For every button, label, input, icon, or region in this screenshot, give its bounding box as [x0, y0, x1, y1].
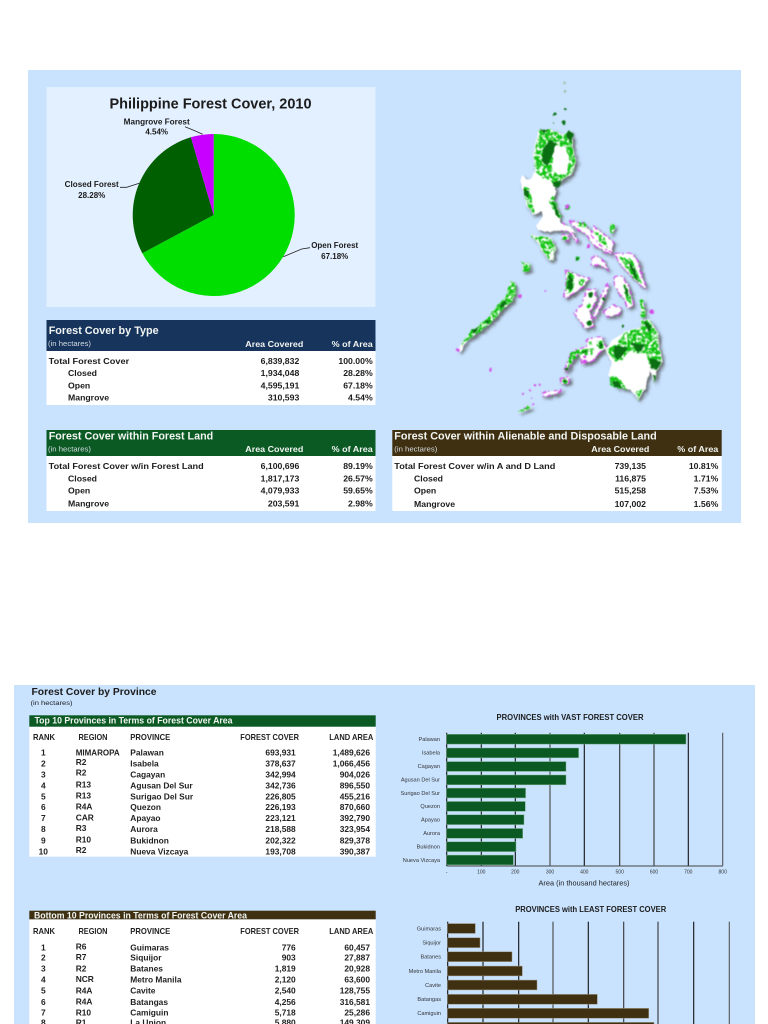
- table: top 10 provinces: R13: [76, 790, 91, 800]
- table: forest cover within alienable and disposable land: 1.56%: [694, 499, 719, 509]
- table: forest cover by type: 310,593: [268, 393, 299, 403]
- pie slice: mangrove forest: [191, 134, 214, 215]
- chart: provinces with vast forest cover: Agusan Del Sur: [401, 778, 440, 784]
- chart title: PROVINCES with LEAST FOREST COVER: [515, 905, 666, 914]
- chart: provinces with vast forest cover: 100: [477, 870, 486, 876]
- table: bottom 10 provinces: Camiguin: [130, 1007, 168, 1017]
- table: forest cover within forest land: % of Area: [332, 444, 373, 454]
- table: top 10 provinces: R2: [76, 845, 87, 855]
- chart: provinces with vast forest cover: 500: [616, 870, 624, 876]
- pie label: closed forest: [65, 180, 139, 200]
- table: bottom 10 provinces: 60,457: [344, 942, 370, 952]
- table: top 10 provinces: 193,708: [265, 846, 296, 856]
- table: forest cover by type: 1,934,048: [261, 368, 299, 378]
- chart: provinces with vast forest cover: 600: [650, 870, 658, 876]
- table: bottom 10 provinces: RANK: [33, 926, 55, 936]
- table: forest cover within forest land: Open: [68, 486, 90, 496]
- table: top 10 provinces: Bukidnon: [130, 835, 169, 845]
- chart: provinces with least forest cover: Batanes: [420, 955, 441, 961]
- heading: forest cover by province: Forest Cover by Province: [32, 687, 157, 698]
- table: bottom 10 provinces: 7: [41, 1007, 46, 1017]
- table: top 10 provinces: CAR: [76, 813, 94, 823]
- chart: provinces with vast forest cover: 700: [684, 870, 693, 876]
- chart: provinces with vast forest cover: Bukidnon: [417, 844, 440, 850]
- pie label: open forest: [283, 241, 359, 261]
- chart: provinces with least forest cover: [409, 905, 729, 1024]
- chart: provinces with vast forest cover: Nueva Vizcaya: [403, 858, 441, 864]
- table: forest cover by type: 67.18%: [343, 380, 373, 390]
- dark green closed forest: [472, 82, 662, 388]
- table: bottom 10 provinces: 25,286: [344, 1007, 370, 1017]
- table: forest cover by type: 6,839,832: [261, 356, 299, 366]
- table: forest cover within alienable and disposable land: % of Area: [677, 444, 718, 454]
- table: forest cover within forest land: Total Forest Cover w/in Forest Land: [49, 461, 204, 471]
- table: forest cover within alienable and disposable land: (in hectares): [394, 446, 437, 454]
- table: forest cover by type: 100.00%: [338, 356, 373, 366]
- table: bottom 10 provinces: 316,581: [340, 997, 370, 1007]
- land with magenta fringe and shadow: [457, 129, 663, 412]
- table: forest cover within forest land: Mangrove: [68, 499, 109, 509]
- table: forest cover within forest land: 6,100,696: [261, 461, 299, 471]
- table: forest cover within alienable and disposable land: 116,875: [615, 473, 646, 483]
- pie label: open forest: 67.18%: [321, 252, 348, 261]
- table: top 10 provinces: 3: [41, 770, 46, 780]
- table: top 10 provinces: 202,322: [265, 835, 296, 845]
- pie label: closed forest: Closed Forest: [65, 180, 119, 189]
- table: bottom 10 provinces: 1: [41, 942, 46, 952]
- table: forest cover within alienable and disposable land: 107,002: [615, 499, 646, 509]
- table: bottom 10 provinces: Bottom 10 Provinces in Terms of Forest Cover Area: [34, 909, 248, 920]
- table: top 10 provinces: Apayao: [130, 813, 161, 823]
- table: top 10 provinces: 6: [41, 802, 46, 812]
- table: top 10 provinces: R4A: [76, 802, 92, 812]
- table: top 10 provinces: Isabela: [130, 758, 159, 768]
- table: top 10 provinces: 9: [41, 835, 46, 845]
- table: bottom 10 provinces: 63,600: [344, 975, 370, 985]
- table: top 10 provinces: 218,588: [265, 824, 296, 834]
- table: top 10 provinces: Cagayan: [130, 770, 165, 780]
- table: top 10 provinces: Aurora: [130, 824, 158, 834]
- table: top 10 provinces: 1,489,626: [333, 747, 370, 757]
- table: top 10 provinces: Quezon: [130, 802, 161, 812]
- table: top 10 provinces: 223,121: [265, 813, 296, 823]
- table: bottom 10 provinces: 20,928: [344, 964, 370, 974]
- table: forest cover by type: % of Area: [332, 339, 373, 349]
- chart title: PROVINCES with VAST FOREST COVER: [496, 713, 644, 722]
- table: forest cover within alienable and disposable land: 7.53%: [694, 486, 719, 496]
- table: bottom 10 provinces: 2: [41, 953, 46, 963]
- table: bottom 10 provinces: Guimaras: [130, 942, 169, 952]
- magenta mangrove specks: [456, 205, 654, 409]
- pie label: mangrove forest: 4.54%: [145, 128, 168, 136]
- table: top 10 provinces: 829,378: [340, 835, 370, 845]
- table: top 10 provinces: 342,994: [265, 770, 296, 780]
- table: bottom 10 provinces: 2,120: [275, 975, 296, 985]
- table: top 10 provinces: PROVINCE: [130, 732, 171, 742]
- table heading: forest cover by type: Forest Cover by Type: [49, 325, 159, 337]
- table: top 10 provinces: 904,026: [340, 770, 370, 780]
- table: top 10 provinces: 693,931: [265, 747, 296, 757]
- table: forest cover by type: Closed: [68, 368, 97, 378]
- chart: provinces with least forest cover: Siquijor: [422, 941, 441, 947]
- table: bottom 10 provinces: 5,718: [275, 1007, 296, 1017]
- table: forest cover within alienable and disposable land: Closed: [414, 473, 443, 483]
- table: bottom 10 provinces: 4,256: [275, 997, 296, 1007]
- chart: provinces with vast forest cover: [400, 713, 727, 888]
- table: bottom 10 provinces: Siquijor: [130, 953, 162, 963]
- chart: provinces with vast forest cover: Isabela: [422, 750, 441, 756]
- table: bottom 10 provinces: R4A: [76, 996, 92, 1006]
- table: forest cover within forest land: 89.19%: [343, 461, 373, 471]
- table: top 10 provinces: [29, 714, 376, 857]
- table: top 10 provinces: R2: [76, 768, 87, 778]
- panel: pie chart: [46, 87, 376, 307]
- pie slice: open forest: [142, 134, 295, 296]
- table: bottom 10 provinces: R2: [76, 963, 87, 973]
- bright green open forest: [461, 129, 662, 412]
- table: bottom 10 provinces: R7: [76, 952, 87, 962]
- pie label: mangrove forest: [124, 118, 203, 136]
- white central plains: [549, 145, 645, 392]
- table: forest cover within alienable and disposable land: Mangrove: [414, 499, 455, 509]
- table: top 10 provinces: R3: [76, 823, 87, 833]
- table: forest cover within alienable and disposable land: [392, 430, 722, 511]
- chart: provinces with vast forest cover: 300: [546, 870, 554, 876]
- table: bottom 10 provinces: 2,540: [275, 986, 296, 996]
- table: forest cover within forest land: 26.57%: [343, 473, 373, 483]
- table: forest cover within alienable and disposable land: 739,135: [615, 461, 646, 471]
- table heading: within alienable and disposable land: Forest Cover within Alienable and Disposable Land: [394, 430, 657, 442]
- table: bottom 10 provinces: 1,819: [275, 964, 296, 974]
- table: top 10 provinces: Palawan: [130, 747, 164, 757]
- table: forest cover within forest land: 1,817,173: [261, 473, 299, 483]
- heading: pie chart title: Philippine Forest Cover, 2010: [110, 96, 312, 112]
- table: bottom 10 provinces: REGION: [78, 926, 108, 936]
- table: bottom 10 provinces: NCR: [76, 974, 94, 984]
- table: bottom 10 provinces: 27,887: [344, 953, 370, 963]
- table: top 10 provinces: 455,216: [340, 791, 370, 801]
- table: forest cover within forest land: (in hectares): [48, 446, 91, 454]
- chart: provinces with least forest cover: Metro Manila: [409, 969, 442, 975]
- chart: provinces with vast forest cover: 200: [511, 870, 520, 876]
- table: top 10 provinces: 226,193: [265, 802, 296, 812]
- table: top 10 provinces: 1: [41, 747, 46, 757]
- table: bottom 10 provinces: LAND AREA: [329, 926, 373, 936]
- table: forest cover within alienable and disposable land: 515,258: [615, 486, 646, 496]
- table: forest cover within alienable and disposable land: 1.71%: [694, 473, 719, 483]
- table: bottom 10 provinces: 6: [41, 997, 46, 1007]
- table: forest cover within forest land: 203,591: [268, 499, 299, 509]
- table: top 10 provinces: 5: [41, 791, 46, 801]
- chart: provinces with least forest cover: Batangas: [417, 997, 441, 1003]
- chart: provinces with vast forest cover: 400: [580, 870, 589, 876]
- table: forest cover within forest land: 2.98%: [348, 499, 373, 509]
- axis title: Area (in thousand hectares): [538, 878, 630, 888]
- table: bottom 10 provinces: 4: [41, 975, 46, 985]
- chart: provinces with vast forest cover: Apayao: [421, 818, 440, 824]
- table: forest cover within forest land: Area Covered: [245, 444, 303, 454]
- table: top 10 provinces: R13: [76, 779, 91, 789]
- table: top 10 provinces: 4: [41, 781, 46, 791]
- table: bottom 10 provinces: R6: [76, 941, 87, 951]
- chart: provinces with vast forest cover: Quezon: [420, 804, 440, 810]
- table: bottom 10 provinces: PROVINCE: [130, 926, 171, 936]
- table: forest cover by type: 4.54%: [348, 393, 373, 403]
- table: top 10 provinces: 2: [41, 758, 46, 768]
- table: forest cover by type: Open: [68, 380, 90, 390]
- pie slice: closed forest: [133, 137, 214, 253]
- panel: forest cover by province: [14, 685, 755, 1024]
- map: Philippines forest cover: [456, 82, 663, 412]
- table: top 10 provinces: Nueva Vizcaya: [130, 846, 189, 856]
- table: bottom 10 provinces: 3: [41, 964, 46, 974]
- chart: provinces with vast forest cover: Palawan: [419, 737, 440, 743]
- pie label: mangrove forest: Mangrove Forest: [124, 118, 190, 126]
- panel: national forest cover: [28, 70, 741, 523]
- table: bottom 10 provinces: 903: [282, 953, 296, 963]
- chart: provinces with vast forest cover: -: [446, 870, 448, 876]
- table: top 10 provinces: 7: [41, 813, 46, 823]
- table: top 10 provinces: 323,954: [340, 824, 370, 834]
- table: top 10 provinces: 8: [41, 824, 46, 834]
- chart: provinces with least forest cover: Cavite: [425, 983, 441, 989]
- table: forest cover within forest land: 4,079,933: [261, 486, 299, 496]
- table: top 10 provinces: 896,550: [340, 781, 370, 791]
- table heading: within forest land: Forest Cover within Forest Land: [49, 430, 213, 442]
- table: forest cover by type: (in hectares): [48, 341, 91, 348]
- table: top 10 provinces: 870,660: [340, 802, 370, 812]
- table: bottom 10 provinces: 128,755: [340, 986, 370, 996]
- table: forest cover by type: [46, 320, 376, 405]
- chart: provinces with vast forest cover: Surigao Del Sur: [400, 791, 440, 797]
- table: bottom 10 provinces: Batanes: [130, 964, 163, 974]
- table: top 10 provinces: 226,805: [265, 791, 296, 801]
- note: units: (in hectares): [30, 700, 72, 707]
- table: top 10 provinces: Agusan Del Sur: [130, 781, 193, 791]
- table: forest cover within forest land: Closed: [68, 473, 97, 483]
- table: forest cover within alienable and disposable land: Total Forest Cover w/in A and D Land: [394, 461, 555, 471]
- table: bottom 10 provinces: R10: [76, 1007, 91, 1017]
- table: bottom 10 provinces: Batangas: [130, 997, 168, 1007]
- table: top 10 provinces: 10: [39, 846, 48, 856]
- table: bottom 10 provinces: 5: [41, 986, 46, 996]
- table: top 10 provinces: Surigao Del Sur: [130, 791, 194, 801]
- table: top 10 provinces: 1,066,456: [333, 758, 370, 768]
- table: top 10 provinces: R2: [76, 757, 87, 767]
- table: bottom 10 provinces: [29, 909, 376, 1024]
- chart: provinces with vast forest cover: Aurora: [423, 831, 441, 837]
- table: top 10 provinces: R10: [76, 834, 91, 844]
- table: forest cover within alienable and disposable land: Area Covered: [591, 444, 649, 454]
- table: top 10 provinces: 378,637: [265, 758, 296, 768]
- table: forest cover within alienable and disposable land: 10.81%: [689, 461, 719, 471]
- table: forest cover within alienable and disposable land: Open: [414, 486, 436, 496]
- table: top 10 provinces: MIMAROPA: [76, 747, 120, 757]
- pie label: closed forest: 28.28%: [78, 191, 105, 200]
- pie label: open forest: Open Forest: [311, 241, 359, 250]
- table: forest cover by type: Mangrove: [68, 393, 109, 403]
- table: top 10 provinces: Top 10 Provinces in Terms of Forest Cover Area: [34, 714, 233, 726]
- table: forest cover by type: 28.28%: [343, 368, 373, 378]
- table: bottom 10 provinces: Cavite: [130, 986, 156, 996]
- table: top 10 provinces: 342,736: [265, 781, 296, 791]
- table: bottom 10 provinces: Metro Manila: [130, 975, 182, 985]
- chart: provinces with vast forest cover: Cagayan: [418, 764, 440, 770]
- table: forest cover within forest land: 59.65%: [343, 486, 373, 496]
- table: bottom 10 provinces: 776: [282, 942, 296, 952]
- chart: provinces with least forest cover: Camiguin: [417, 1011, 441, 1017]
- table: top 10 provinces: LAND AREA: [329, 732, 373, 742]
- table: forest cover within forest land: [46, 430, 376, 511]
- chart: provinces with least forest cover: Guimaras: [417, 926, 441, 932]
- chart: provinces with vast forest cover: 800: [719, 870, 727, 876]
- table: forest cover by type: Area Covered: [245, 339, 303, 349]
- table: bottom 10 provinces: R4A: [76, 985, 92, 995]
- table: forest cover by type: Total Forest Cover: [49, 356, 130, 366]
- table: top 10 provinces: FOREST COVER: [240, 732, 299, 742]
- table: forest cover by type: 4,595,191: [261, 380, 299, 390]
- table: top 10 provinces: 390,387: [340, 846, 370, 856]
- table: top 10 provinces: RANK: [33, 732, 55, 742]
- table: top 10 provinces: 392,790: [340, 813, 370, 823]
- table: bottom 10 provinces: FOREST COVER: [240, 926, 299, 936]
- table: top 10 provinces: REGION: [78, 732, 108, 742]
